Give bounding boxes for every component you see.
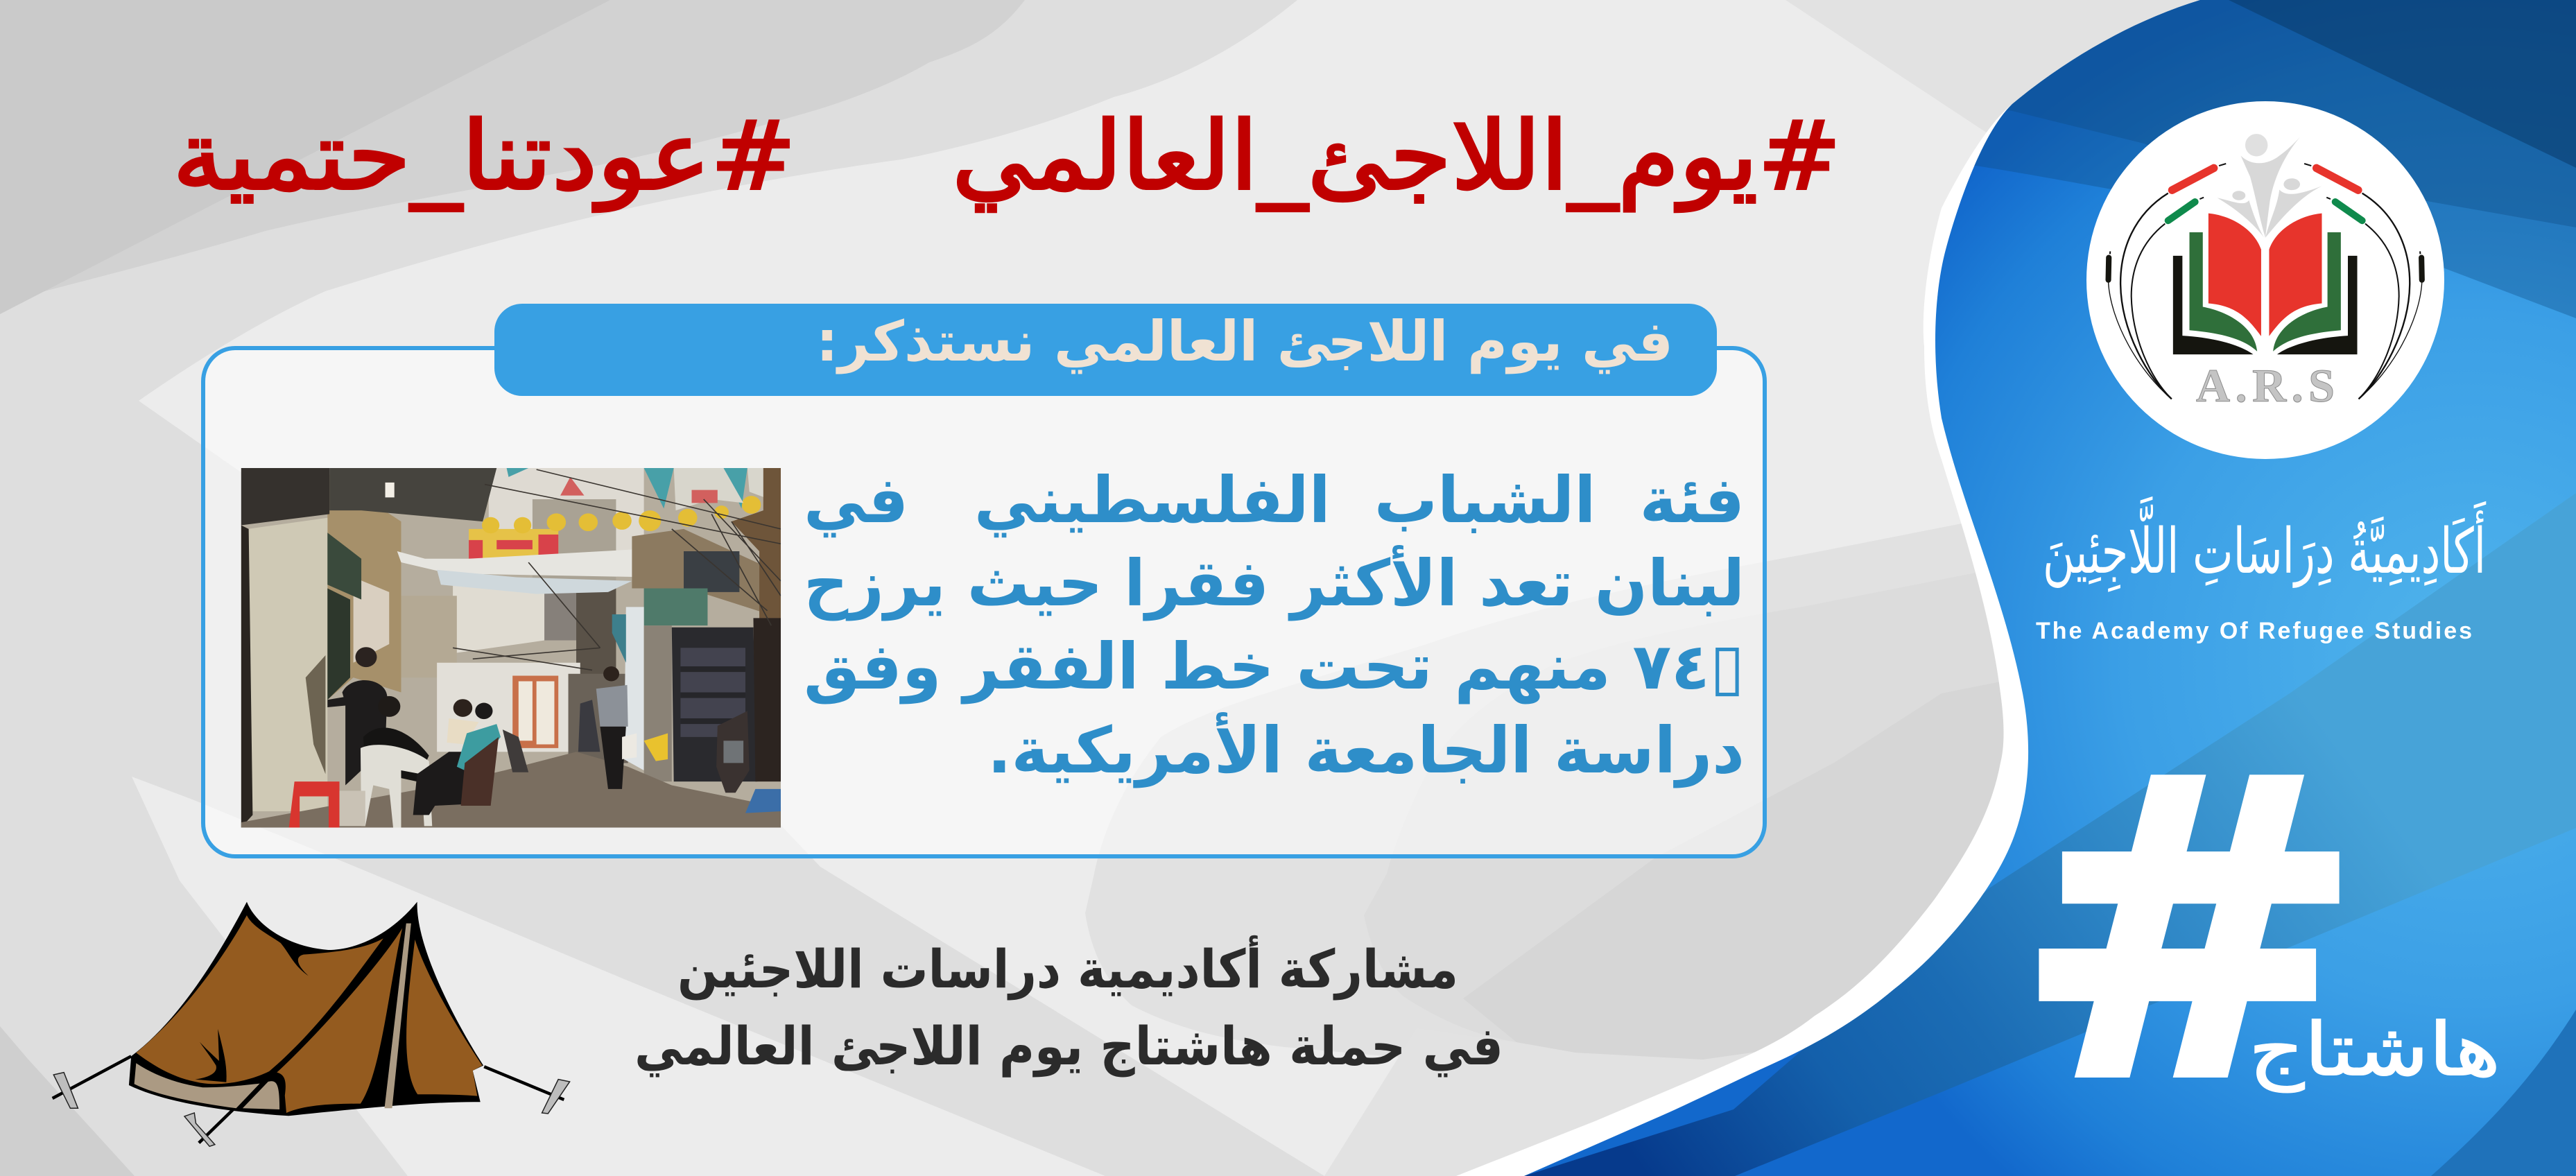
academy name in English: The Academy Of Refugee Studies <box>2036 618 2472 644</box>
body paragraph <box>804 463 1745 788</box>
body paragraph: دراسة الجامعة الأمريكية. <box>987 712 1745 788</box>
caption: academy participation: مشاركة أكاديمية دراسات اللاجئين <box>677 935 1458 1001</box>
photo: refugee camp street <box>241 468 781 828</box>
body paragraph: لبنان تعد الأكثر فقرا حيث يرزح <box>804 545 1745 621</box>
icon: brown tent <box>53 902 570 1146</box>
caption: academy participation: في حملة هاشتاج يوم اللاجئ العالمي <box>634 1015 1503 1078</box>
title: hashtag our return is inevitable: #عودتنا_حتمية <box>173 102 796 212</box>
hashtag word: هاشتاج <box>2249 1008 2500 1093</box>
big hash symbol: # <box>2016 693 2362 1169</box>
emblem: book, figures and reeds <box>2109 134 2422 399</box>
heading pill <box>494 304 1717 396</box>
body paragraph: ▯٧٤ منهم تحت خط الفقر وفق <box>804 630 1745 704</box>
logo: ARS academy emblem <box>2086 101 2444 459</box>
title: hashtag world refugee day: #يوم_اللاجئ_العالمي <box>952 102 1841 212</box>
logo circle <box>2086 101 2444 459</box>
caption: academy participation <box>634 935 1503 1078</box>
logo letters A.R.S: A.R.S <box>2196 359 2335 412</box>
panel: main content card <box>203 304 1765 856</box>
blue side panel background <box>1456 0 2576 1176</box>
panel frame <box>203 348 1765 856</box>
white swoosh border <box>1456 104 2080 1176</box>
heading pill: في يوم اللاجئ العالمي نستذكر: <box>816 309 1673 374</box>
body paragraph: فئة الشباب الفلسطيني في <box>804 463 1745 537</box>
